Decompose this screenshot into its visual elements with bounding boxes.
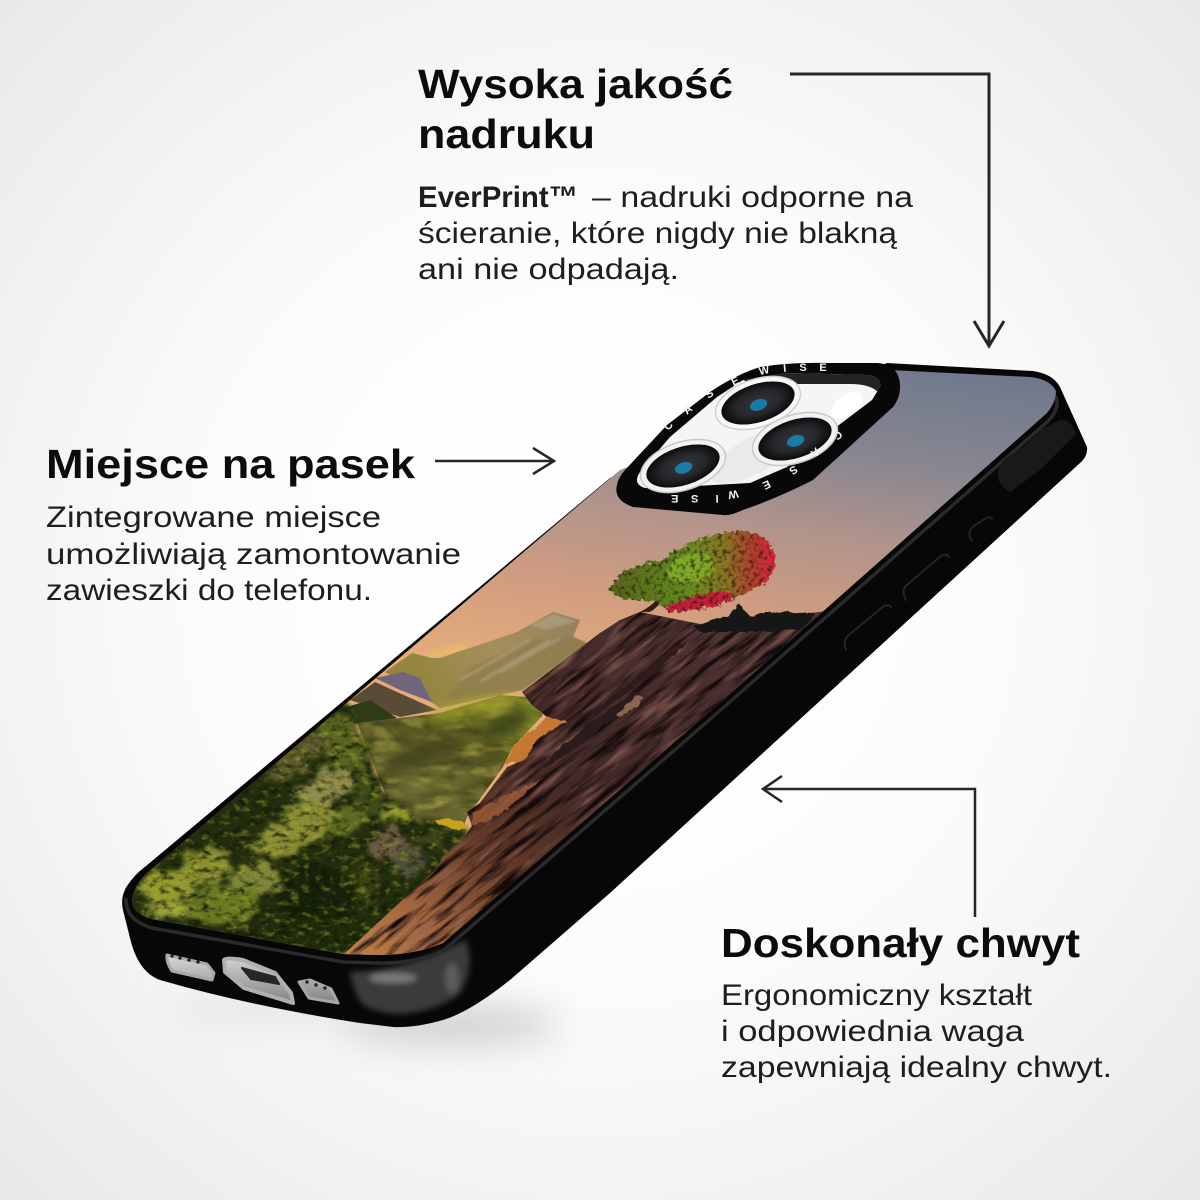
tree trunk <box>640 600 660 612</box>
camera island <box>616 362 900 515</box>
CASEWISE ring lettering: CASEWISE <box>662 362 827 433</box>
CASEWISE ring lettering: CASEWISE <box>671 428 844 504</box>
arrow: grip <box>763 776 975 917</box>
text block: EverPrint description: ścieranie, które nigdy nie blakną <box>418 217 897 250</box>
side switch <box>998 420 1076 492</box>
side buttons <box>845 517 992 650</box>
distant mountain <box>385 612 587 708</box>
text block: strap mount description: zawieszki do telefonu. <box>46 574 372 607</box>
heading block: Wysoka jakość nadruku: nadruku <box>418 111 595 157</box>
horizon glow <box>426 644 466 658</box>
golden field <box>435 818 468 830</box>
camera ring <box>616 363 900 515</box>
forest slope <box>132 701 470 955</box>
bushes on cliff top <box>695 603 815 632</box>
lens: right <box>746 403 844 475</box>
CASEWISE ring lettering <box>662 362 844 504</box>
valley shadows <box>375 694 534 780</box>
heading block: Wysoka jakość nadruku <box>418 61 733 157</box>
arrow: print quality to case back <box>790 74 1004 346</box>
lens: top <box>709 367 807 439</box>
text block: strap mount description <box>46 501 461 607</box>
lens: left <box>634 430 732 502</box>
green valley <box>357 695 543 845</box>
text block: EverPrint description: EverPrint™ <box>418 181 578 214</box>
bumper gloss corner <box>350 940 470 1014</box>
purple peak <box>375 672 432 702</box>
rock cliff <box>344 612 822 955</box>
text block: grip description: Ergonomiczny kształt <box>721 979 1033 1012</box>
arrow: strap mount <box>435 448 554 474</box>
text block: EverPrint description: ani nie odpadają. <box>418 253 679 286</box>
text block: strap mount description: Zintegrowane miejsce <box>46 501 381 534</box>
port: left speaker grill <box>167 954 214 980</box>
port: charging <box>224 958 293 1003</box>
case body <box>122 363 1087 1027</box>
text block: grip description: zapewniają idealny chwyt. <box>721 1051 1112 1084</box>
small green hill <box>330 700 397 725</box>
camera interior <box>637 373 880 488</box>
sky <box>132 370 1056 955</box>
text block: strap mount description: umożliwiają zamontowanie <box>46 538 461 571</box>
heading: Doskonały chwyt: Doskonały chwyt <box>721 920 1080 966</box>
text block: grip description: i odpowiednia waga <box>721 1015 1024 1048</box>
printed artwork <box>132 370 1056 955</box>
heading block: Wysoka jakość nadruku: Wysoka jakość <box>418 61 733 107</box>
case rim <box>126 396 1057 963</box>
drop shadow under phone <box>170 996 560 1045</box>
tree <box>609 531 775 616</box>
phone case <box>122 362 1088 1028</box>
heading: Miejsce na pasek: Miejsce na pasek <box>46 441 415 487</box>
dark hill <box>350 682 437 717</box>
text block: grip description <box>721 979 1112 1084</box>
interior shadow <box>743 373 880 392</box>
tree canopy <box>609 531 775 616</box>
text block: EverPrint description: – nadruki odporne na <box>592 181 913 214</box>
rock ledges and streaks <box>472 638 690 826</box>
flash highlight <box>827 386 867 424</box>
port: right speaker grill <box>299 980 338 1003</box>
text block: EverPrint description <box>418 181 913 286</box>
